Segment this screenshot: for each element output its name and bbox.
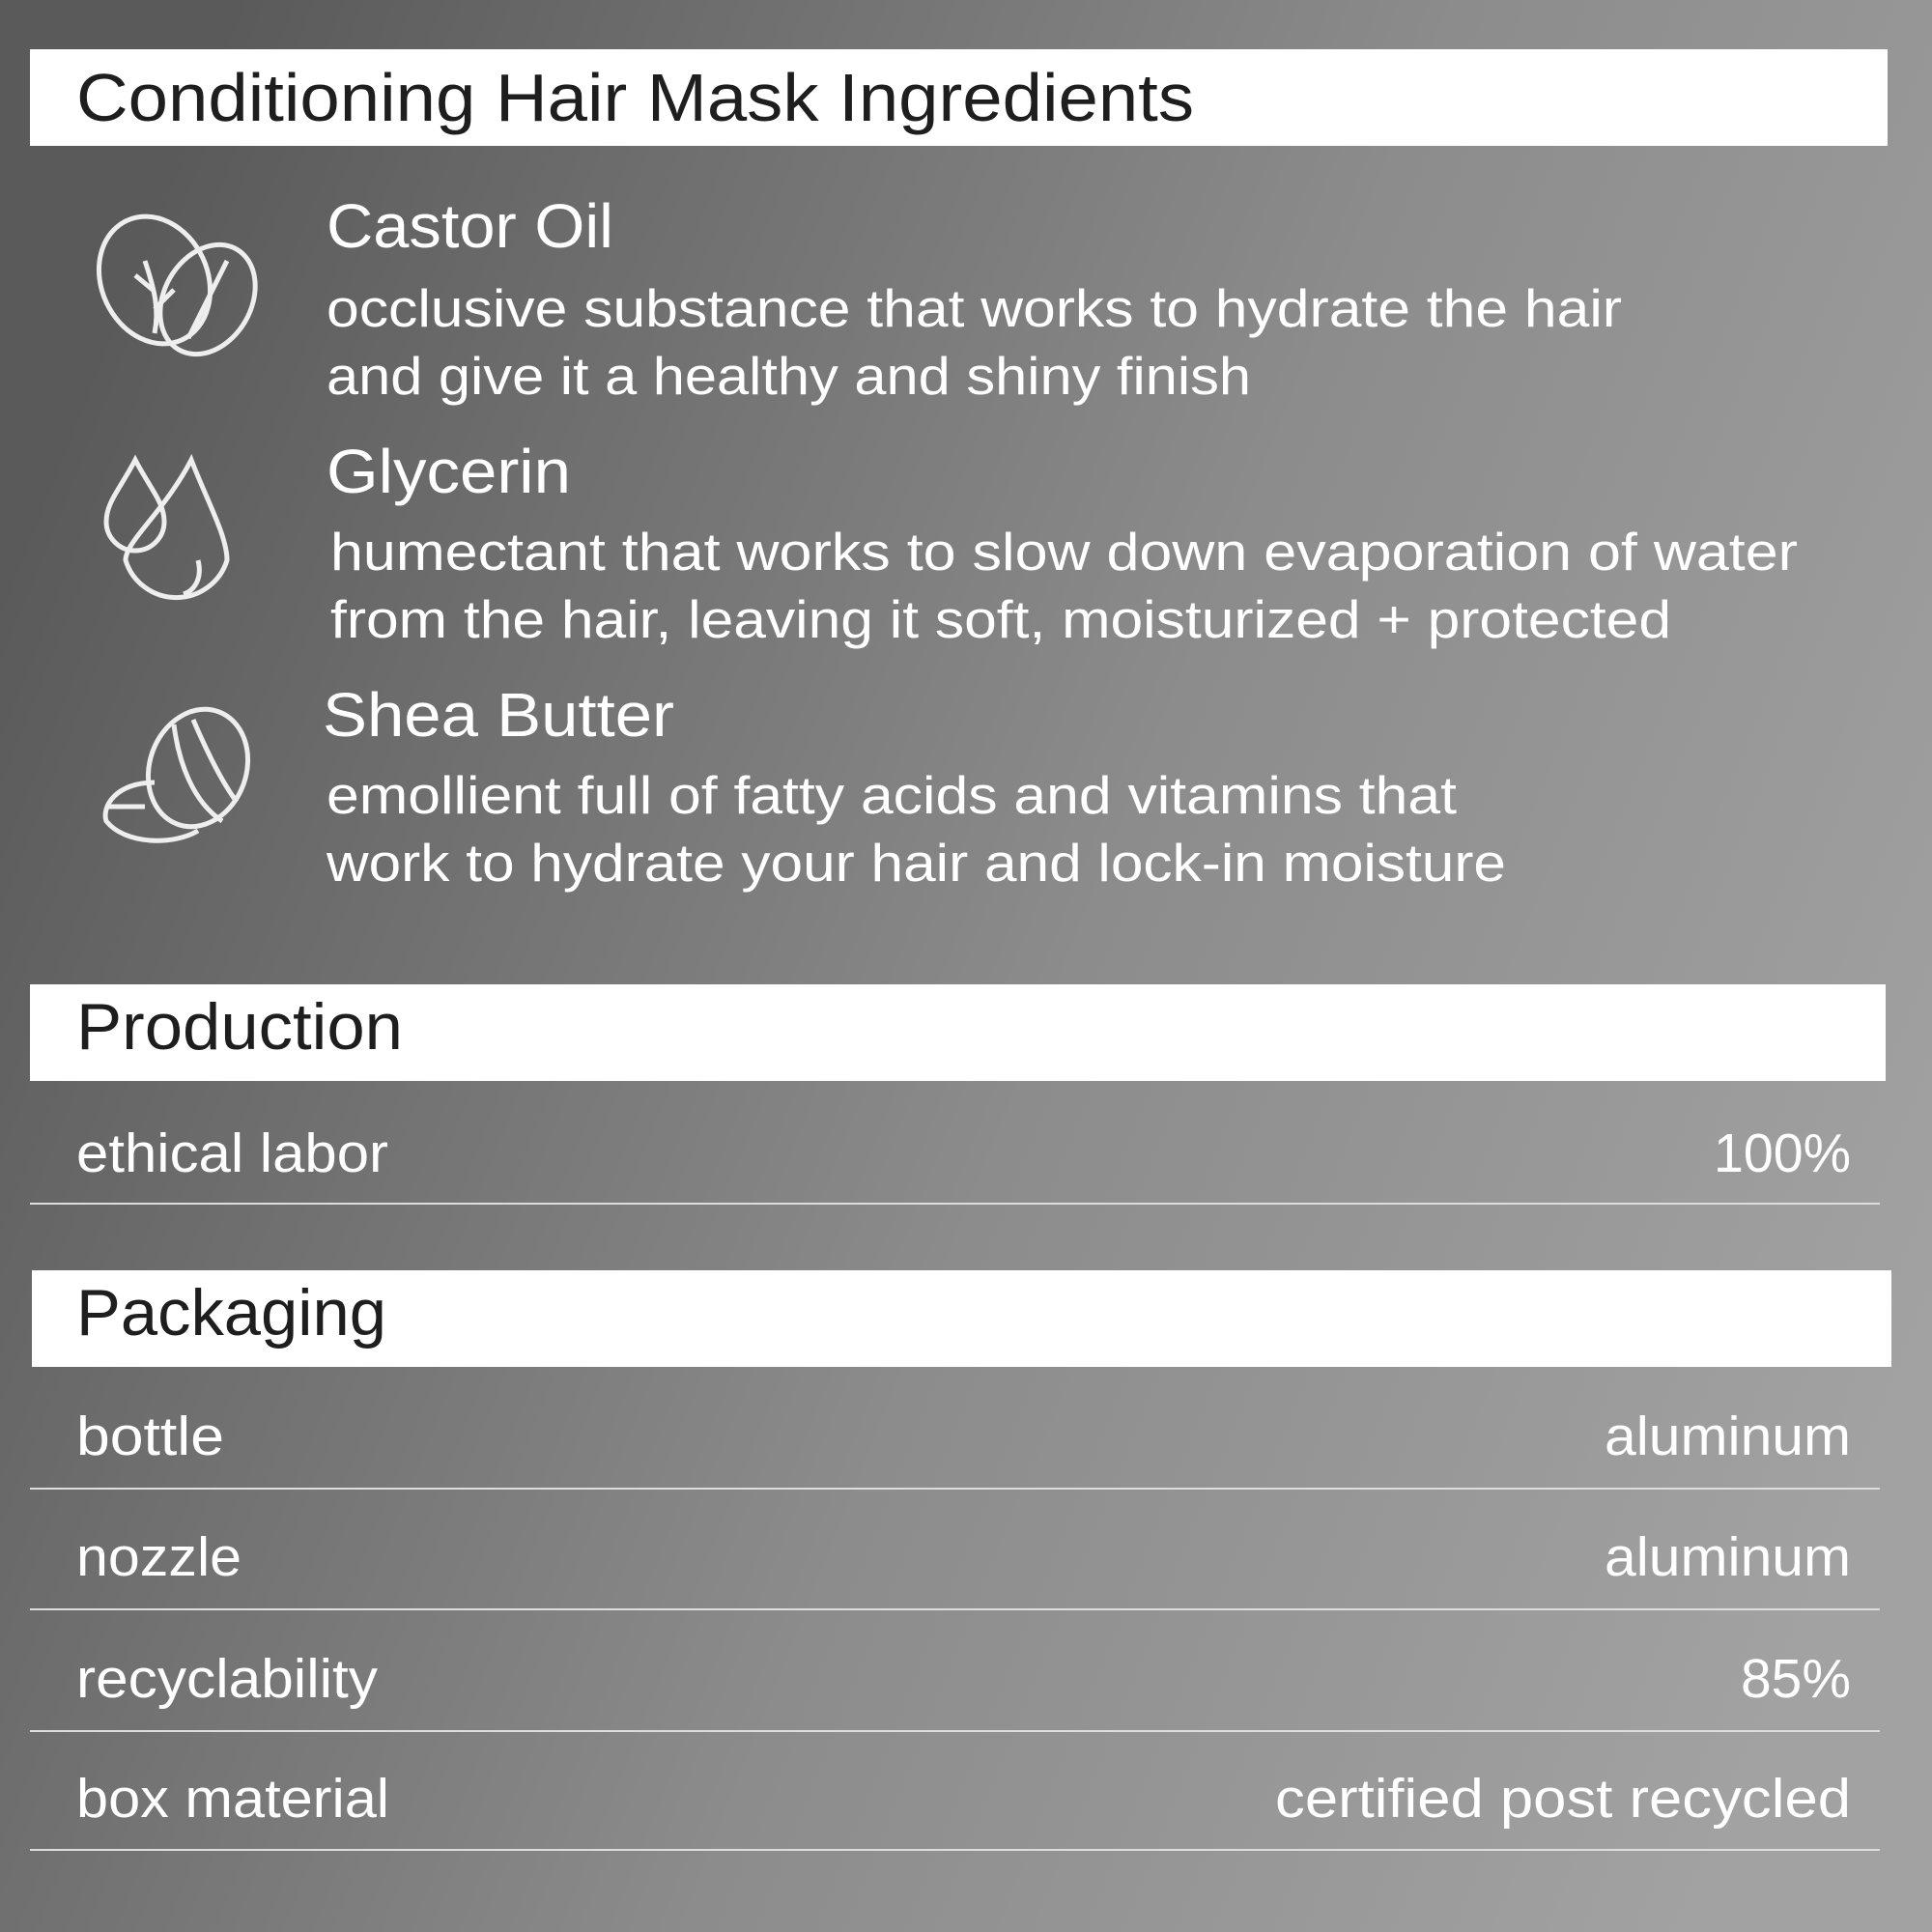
ingredient: shea butter: work to hydrate your hair and lock-in moisture: [326, 833, 1506, 893]
row: nozzle: aluminum: [1605, 1526, 1851, 1588]
packaging bar: [32, 1270, 1891, 1367]
ingredient: glycerin: [327, 437, 1798, 649]
row: box material: [30, 1768, 1880, 1851]
production bar: [30, 984, 1886, 1081]
ingredient: castor oil: occlusive substance that works to hydrate the hair: [327, 278, 1622, 338]
title bar: Conditioning Hair Mask Ingredients: [76, 60, 1194, 135]
ingredient: castor oil: [327, 191, 1622, 406]
row: box material: box material: [76, 1768, 389, 1830]
row: bottle: [30, 1406, 1880, 1490]
title bar: [30, 49, 1888, 146]
row: nozzle: [30, 1526, 1880, 1610]
icon: shea nut: [105, 696, 264, 840]
ingredient: glycerin: humectant that works to slow down evaporation of water: [330, 522, 1798, 582]
row: bottle: bottle: [76, 1406, 224, 1467]
ingredient: shea butter: emollient full of fatty acids and vitamins that: [327, 765, 1457, 825]
ingredient: castor oil: Castor Oil: [327, 191, 613, 261]
packaging bar: Packaging: [76, 1276, 386, 1350]
row: ethical labor: [30, 1122, 1880, 1205]
production bar: Production: [76, 990, 403, 1064]
icon: castor beans: [78, 198, 274, 371]
ingredient: shea butter: Shea Butter: [323, 680, 674, 750]
ingredient: glycerin: from the hair, leaving it soft, moisturized + protected: [330, 589, 1671, 649]
row: recyclability: 85%: [1741, 1648, 1851, 1710]
icon: drops: [106, 460, 227, 598]
row: ethical labor: ethical labor: [76, 1122, 388, 1184]
ingredient: shea butter: [323, 680, 1506, 893]
row: bottle: aluminum: [1605, 1406, 1851, 1467]
ingredient: glycerin: Glycerin: [327, 437, 571, 506]
row: nozzle: nozzle: [76, 1526, 242, 1588]
row: box material: certified post recycled: [1275, 1768, 1851, 1830]
ingredient: castor oil: and give it a healthy and shiny finish: [327, 346, 1251, 406]
row: recyclability: recyclability: [76, 1648, 379, 1710]
row: recyclability: [30, 1648, 1880, 1732]
row: ethical labor: 100%: [1714, 1122, 1851, 1184]
